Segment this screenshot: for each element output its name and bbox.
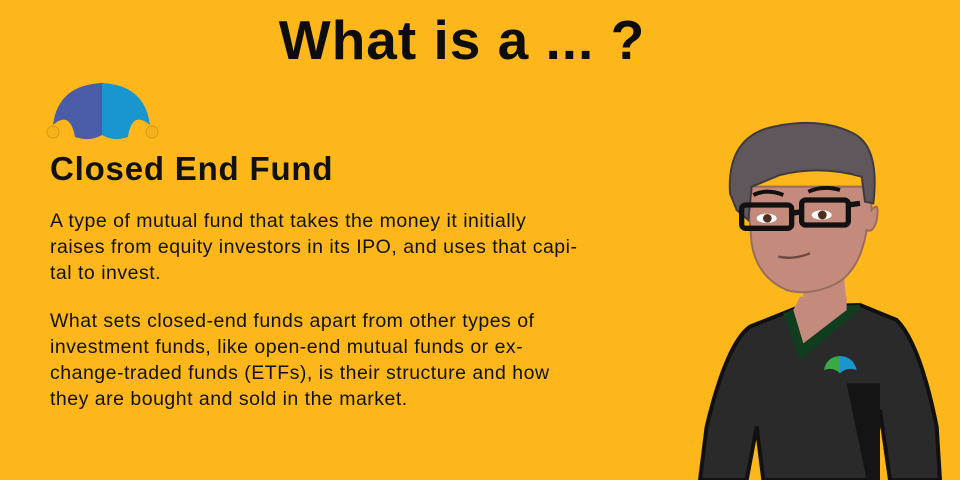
- body: [700, 305, 940, 480]
- neck: [803, 270, 847, 310]
- glasses: [742, 200, 860, 228]
- icon: jester hat logo: [46, 83, 158, 140]
- text block: structure: they are bought and sold in the market.: [50, 388, 408, 410]
- text block: structure: [50, 310, 550, 410]
- heading: Closed End Fund: [50, 150, 333, 187]
- text block: definition: [50, 210, 577, 284]
- title: What is a ... ?: [279, 9, 645, 71]
- character illustration: [698, 122, 942, 480]
- text block: structure: What sets closed-end funds apart from other types of: [50, 310, 534, 332]
- chest logo: [824, 356, 840, 373]
- text block: definition: A type of mutual fund that takes the money it initially: [50, 210, 526, 232]
- text block: definition: tal to invest.: [50, 262, 161, 284]
- collar: [783, 305, 860, 360]
- text block: structure: investment funds, like open-end mutual funds or ex-: [50, 336, 523, 358]
- hair: [730, 123, 875, 220]
- text block: definition: raises from equity investors in its IPO, and uses that capi-: [50, 236, 577, 258]
- face: [747, 187, 878, 292]
- text block: structure: change-traded funds (ETFs), is their structure and how: [50, 362, 550, 384]
